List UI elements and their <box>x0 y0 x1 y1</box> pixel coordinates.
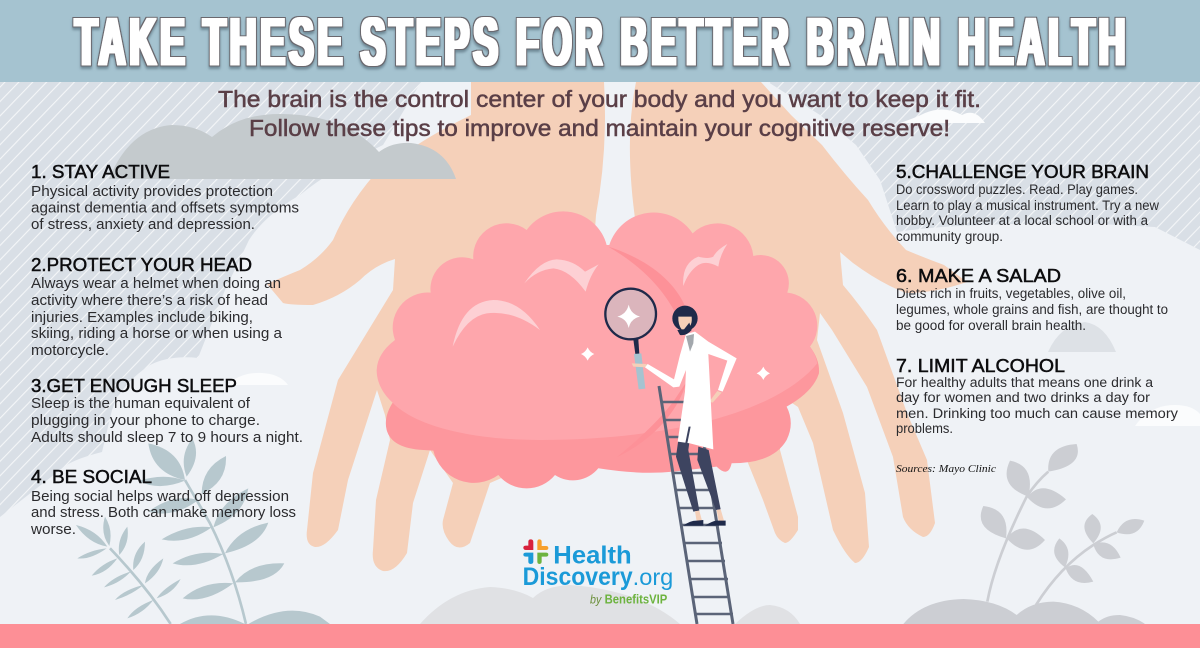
header band <box>0 0 1200 82</box>
scrub collar <box>686 334 694 352</box>
subtitle: Follow these tips to improve and maintain your cognitive reserve! <box>249 115 950 141</box>
tip 3: get enough sleep: 3.GET ENOUGH SLEEP <box>31 375 237 396</box>
tip 6: make a salad: be good for overall brain health. <box>896 318 1086 333</box>
tip 1: stay active: Physical activity provides protection <box>31 184 273 200</box>
lab coat <box>645 332 737 449</box>
ladder <box>659 386 733 624</box>
illustration: brain <box>377 211 819 488</box>
cloud: white left middle <box>228 373 288 385</box>
tip 1: stay active: against dementia and offsets symptoms <box>31 200 299 216</box>
tip 3: get enough sleep <box>31 375 303 446</box>
sparkles <box>581 347 770 380</box>
ankles <box>695 509 724 521</box>
logo: HealthDiscovery.org by BenefitsVIP: BenefitsVIP <box>605 592 668 606</box>
logo wordmark: Health <box>553 542 632 569</box>
beard <box>677 323 692 335</box>
tip 7: limit alcohol: For healthy adults that means one drink a <box>896 375 1154 390</box>
tip 2: protect your head: motorcycle. <box>31 343 109 359</box>
tip 6: make a salad: 6. MAKE A SALAD <box>896 265 1061 286</box>
tip 7: limit alcohol: day for women and two drinks a day for <box>896 390 1151 405</box>
cloud: bottom centre <box>420 585 800 624</box>
tip 6: make a salad: Diets rich in fruits, vegetables, olive oil, <box>896 286 1126 301</box>
coat slit <box>685 427 691 443</box>
subtitle <box>218 86 981 141</box>
tip 5: challenge your brain: Learn to play a musical instrument. Try a new <box>896 198 1159 213</box>
magnifying glass <box>605 289 656 389</box>
tip 2: protect your head: Always wear a helmet when doing an <box>31 276 281 292</box>
cloud: grey top left <box>109 114 456 179</box>
tip 1: stay active <box>31 161 299 233</box>
tip 2: protect your head: activity where there’s a risk of head <box>31 293 268 309</box>
title: TAKE THESE STEPS FOR BETTER BRAIN HEALTH <box>75 4 1125 80</box>
cloud: white top right <box>900 109 985 123</box>
logo: HealthDiscovery.org by BenefitsVIP: .org <box>633 564 673 590</box>
tip 3: get enough sleep: Sleep is the human equivalent of <box>31 396 251 412</box>
tip 7: limit alcohol: 7. LIMIT ALCOHOL <box>896 355 1065 376</box>
tip 2: protect your head: injuries. Examples include biking, <box>31 310 253 326</box>
scientist with magnifying glass <box>605 289 737 526</box>
tip 4: be social: 4. BE SOCIAL <box>31 466 152 487</box>
sources: Sources: Mayo Clinic <box>896 463 996 475</box>
tip 3: get enough sleep: Adults should sleep 7 to 9 hours a night. <box>31 430 303 446</box>
tip 6: make a salad <box>896 265 1168 333</box>
logo cross icon <box>523 539 548 564</box>
tip 7: limit alcohol: problems. <box>896 421 953 436</box>
illustration: right hand <box>630 82 967 563</box>
hands <box>632 363 722 403</box>
logo: HealthDiscovery.org by BenefitsVIP <box>523 539 673 606</box>
logo: HealthDiscovery.org by BenefitsVIP: Discovery <box>523 564 633 591</box>
illustration: left hand <box>267 82 605 571</box>
bottom bar <box>0 624 1200 648</box>
brain fissure <box>608 247 687 457</box>
tip 6: make a salad: legumes, whole grains and fish, are thought to <box>896 302 1168 317</box>
logo: HealthDiscovery.org by BenefitsVIP: by <box>590 592 602 606</box>
tip 5: challenge your brain: hobby. Volunteer at a local school or with a <box>896 213 1149 228</box>
tip 2: protect your head <box>31 254 282 359</box>
tip 4: be social: Being social helps ward off depression <box>31 489 289 505</box>
tip 5: challenge your brain: Do crossword puzzles. Read. Play games. <box>896 182 1138 197</box>
plants: right bottom <box>903 444 1145 624</box>
tip 3: get enough sleep: plugging in your phone to charge. <box>31 413 260 429</box>
legs <box>676 440 721 512</box>
hatched background: top right <box>768 82 1200 250</box>
cloud: grey right middle <box>1048 322 1116 352</box>
tip 1: stay active: 1. STAY ACTIVE <box>31 161 170 182</box>
shoes <box>683 520 726 526</box>
tip 2: protect your head: skiing, riding a horse or when using a <box>31 326 282 342</box>
tip 5: challenge your brain <box>896 161 1159 244</box>
plants: left bottom <box>76 438 330 624</box>
brain highlights <box>453 244 727 347</box>
head <box>672 306 698 331</box>
hatched background: top left <box>0 82 421 517</box>
tip 4: be social <box>30 466 296 538</box>
tip 7: limit alcohol: men. Drinking too much can cause memory <box>896 406 1178 421</box>
face <box>678 317 692 329</box>
tip 7: limit alcohol <box>896 355 1178 436</box>
cloud: white right lower <box>1135 405 1200 426</box>
tip 2: protect your head: 2.PROTECT YOUR HEAD <box>31 254 252 275</box>
tip 4: be social: worse. <box>30 522 76 538</box>
tip 5: challenge your brain: 5.CHALLENGE YOUR BRAIN <box>896 161 1149 182</box>
tip 4: be social: and stress. Both can make memory loss <box>31 505 296 521</box>
subtitle: The brain is the control center of your body and you want to keep it fit. <box>218 86 981 112</box>
tip 5: challenge your brain: community group. <box>896 229 1003 244</box>
tip 1: stay active: of stress, anxiety and depression. <box>31 217 255 233</box>
